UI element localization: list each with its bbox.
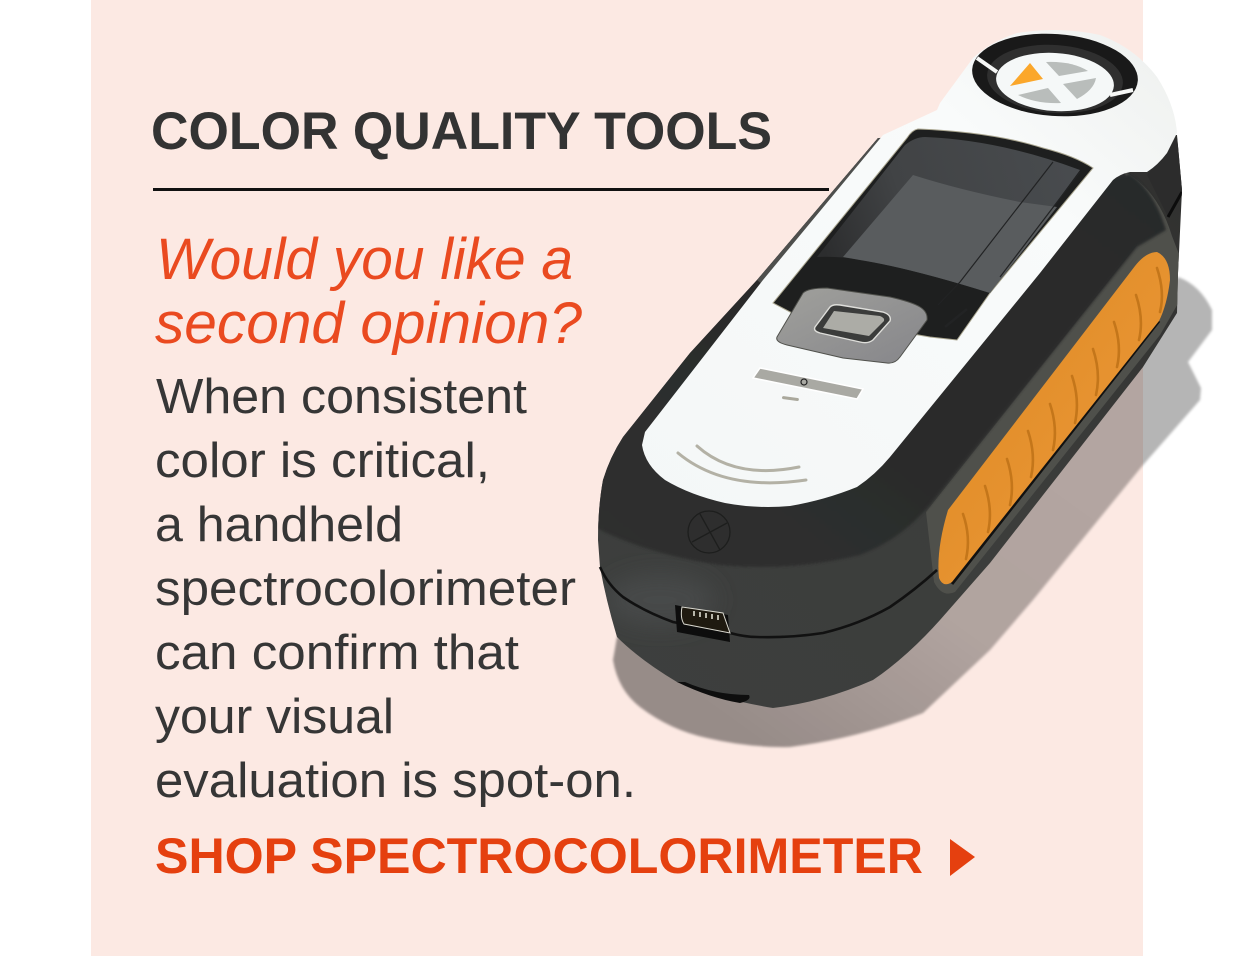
center key (815, 305, 890, 343)
body text: evaluation is spot-on. (155, 754, 636, 808)
body text: spectrocolorimeter (155, 562, 576, 616)
device shadow (613, 277, 1212, 747)
side slit (1168, 192, 1182, 217)
indicator light (782, 396, 799, 401)
icon: orange triangle (1010, 63, 1043, 86)
port opening (681, 607, 730, 633)
screen lighter display area (843, 175, 1057, 293)
dial inner ring (985, 40, 1125, 118)
grip pad (938, 252, 1170, 584)
body text: can confirm that (155, 626, 519, 680)
white face and head (642, 30, 1177, 507)
body text: a handheld (155, 498, 403, 552)
gray dial segments (1018, 62, 1096, 103)
subheading: Would you like a (156, 227, 573, 292)
body text (155, 370, 636, 808)
device upper deck (596, 130, 1166, 567)
color dial (969, 28, 1141, 122)
grip hole shadow (952, 321, 1159, 584)
dial ring notches (977, 58, 1133, 95)
body shading (596, 130, 1184, 626)
button surround (777, 288, 927, 363)
gray rim band (926, 172, 1182, 594)
body text: your visual (155, 690, 394, 744)
orange side grip (938, 252, 1170, 584)
bottom slot (677, 682, 750, 703)
heading rule (153, 188, 829, 191)
screen reflection lines (938, 162, 1080, 327)
call to action link: SHOP SPECTROCOLORIMETER (155, 828, 923, 884)
dial black ring (969, 28, 1141, 122)
body text: When consistent (156, 370, 527, 424)
center key cap (823, 311, 884, 336)
dial white disc (994, 49, 1116, 115)
grip ribs (963, 268, 1162, 559)
device lower body (598, 135, 1182, 708)
navigation button (777, 288, 927, 363)
power button bar (753, 368, 863, 399)
screen glass (817, 137, 1080, 293)
mini USB port (675, 605, 730, 642)
device seam (600, 567, 937, 637)
subheading (155, 227, 583, 356)
embossed logo (688, 511, 730, 553)
body text: color is critical, (155, 434, 490, 488)
lower body highlight (604, 578, 704, 622)
heading: COLOR QUALITY TOOLS (151, 102, 772, 161)
icon: arrow (950, 839, 975, 876)
speaker arcs (678, 446, 806, 483)
power button (753, 368, 863, 401)
icon: power symbol (801, 379, 807, 385)
port contacts (694, 611, 718, 620)
display screen (773, 129, 1093, 340)
subheading: second opinion? (155, 291, 583, 356)
device: handheld spectrocolorimeter (596, 28, 1184, 708)
right side panel (1177, 138, 1182, 194)
screen housing (773, 129, 1093, 340)
port housing (675, 605, 730, 642)
outer edge strip (757, 135, 883, 285)
